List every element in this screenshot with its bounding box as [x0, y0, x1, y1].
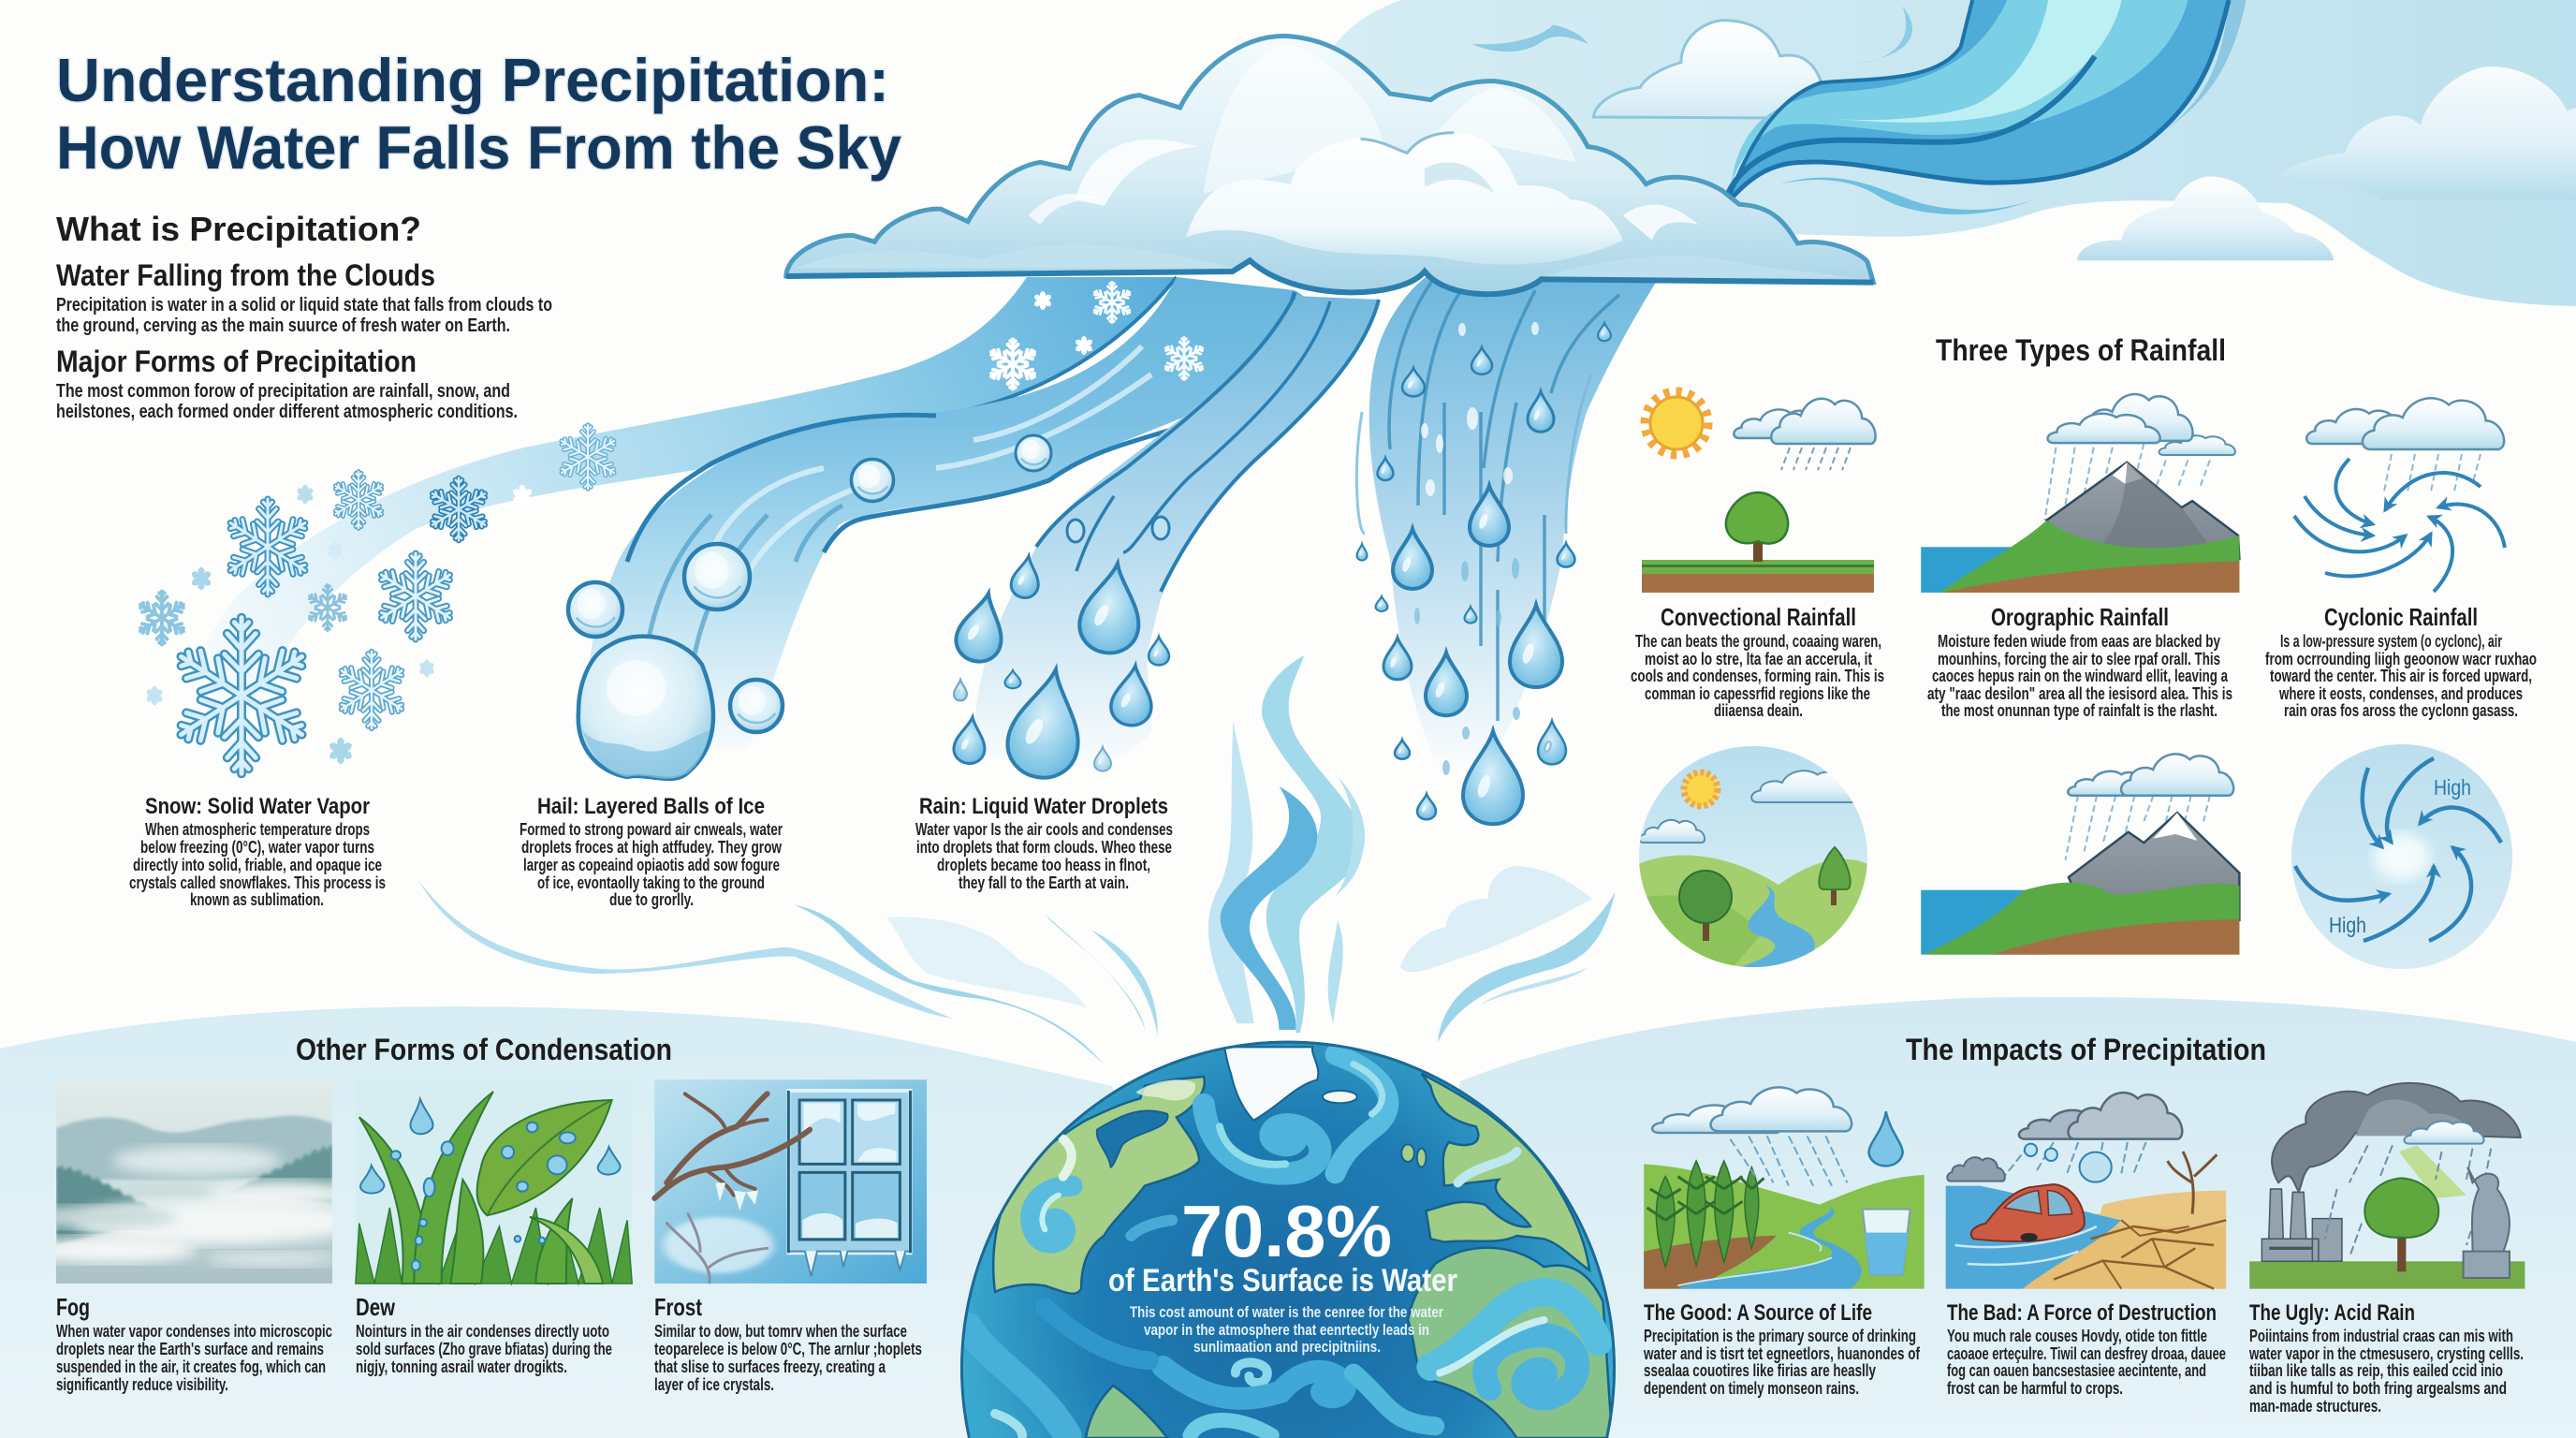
- text: dew: [356, 1293, 612, 1376]
- text: orographic rainfall: the most onunnan type of rainfalt is the rlasht.: [1941, 701, 2217, 720]
- caption: rain: [915, 794, 1173, 892]
- right rain stream ribbon: [1356, 277, 1657, 777]
- intro text: what is precipitation: What is Precipitation?: [56, 210, 421, 248]
- illustration: dew: [356, 1079, 632, 1284]
- caption: hail: droplets froces at high atffudey. They grow: [521, 838, 783, 857]
- text: the ugly: man-made structures.: [2249, 1397, 2381, 1416]
- text: the ugly: The Ugly: Acid Rain: [2249, 1300, 2415, 1326]
- text: the bad: [1947, 1300, 2226, 1398]
- heading: The Impacts of Precipitation: [1906, 1033, 2266, 1066]
- text: orographic rainfall: [1927, 603, 2232, 720]
- caption: hail: Formed to strong poward air cnweals, water: [520, 820, 783, 839]
- intro text: what is precipitation: Major Forms of Precipitation: [56, 345, 417, 378]
- snow stream edge: [936, 277, 1177, 416]
- bottom left panel backdrop: [0, 1006, 1217, 1438]
- text: convectional rainfall: moist ao lo stre, lta fae an accerula, it: [1645, 650, 1872, 668]
- text: orographic rainfall: aty "raac desilon" area all the iesisord alea. This is: [1927, 684, 2232, 703]
- wave stream flowing into the main cloud: [1471, 0, 2247, 214]
- vapor puff: right: [1400, 866, 1592, 972]
- illustration: the good: [1644, 1087, 1925, 1289]
- bottom right panel backdrop: [1404, 997, 2576, 1438]
- wisp: far left: [418, 880, 953, 1019]
- caption: hail: due to grorlly.: [609, 890, 694, 909]
- text: fog: Fog: [56, 1293, 90, 1321]
- heading: Three Types of Rainfall: [1936, 333, 2226, 367]
- caption: snow: known as sublimation.: [190, 890, 324, 909]
- text: frost: Frost: [654, 1293, 702, 1321]
- text: dew: nigjy, tonning asrail water drogikts.: [356, 1357, 567, 1376]
- heading: Other Forms of Condensation: [296, 1033, 672, 1066]
- text: the bad: caoaoe erteçulre. Tiwil can desfrey droaa, dauee: [1947, 1344, 2226, 1363]
- text: fog: [56, 1293, 332, 1394]
- globe statistic: [1108, 1190, 1457, 1356]
- caption: hail: of ice, evontaolly taking to the ground: [537, 873, 765, 892]
- sky cloud: lower right: [2077, 176, 2334, 260]
- land: north america: [993, 1077, 1205, 1294]
- text: the good: dependent on timely monseon rains.: [1644, 1379, 1859, 1398]
- snow stream ribbon: [184, 277, 1177, 768]
- text: the good: water and is tisrt tet egneetlors, huanondes of: [1643, 1344, 1921, 1363]
- section: three types of rainfall: [1631, 333, 2537, 974]
- caption: snow: [129, 794, 386, 909]
- illustration: cyclone high-pressure disc: [2291, 744, 2512, 969]
- text: the good: [1643, 1300, 1921, 1398]
- caption: snow: directly into solid, friable, and opaque ice: [133, 856, 382, 874]
- caption: rain: Rain: Liquid Water Droplets: [919, 794, 1168, 819]
- icon: orographic mountain and rain: [1921, 394, 2239, 593]
- text: frost: Similar to dow, but tomrv when the surface: [654, 1322, 907, 1341]
- illustration: coastal mountain: [1921, 754, 2239, 955]
- globe statistic: sunlimaation and precipitniins.: [1193, 1338, 1381, 1356]
- text: dew: Dew: [356, 1293, 396, 1321]
- caption: snow: below freezing (0°C), water vapor turns: [140, 838, 374, 857]
- text: the good: Precipitation is the primary source of drinking: [1644, 1327, 1916, 1345]
- text: the good: The Good: A Source of Life: [1644, 1300, 1872, 1326]
- ocean swirl currents: [968, 1055, 1599, 1435]
- text: frost: teoparelece is below 0°C, The arnlur ;hoplets: [654, 1340, 922, 1358]
- caption: snow: Snow: Solid Water Vapor: [145, 794, 370, 819]
- section: impacts of precipitation: [1643, 1033, 2525, 1416]
- label: high pressure lower: High: [2329, 913, 2366, 937]
- icon: convectional tree and ground: [1642, 492, 1874, 593]
- caption: snow: When atmospheric temperature drops: [145, 820, 370, 839]
- land: greenland: [1224, 1047, 1318, 1121]
- text: fog: suspended in the air, it creates fog, which can: [56, 1357, 326, 1376]
- illustration: valley scene circle: [1633, 744, 1872, 974]
- earth globe: [960, 1041, 1616, 1438]
- intro text: what is precipitation: heilstones, each formed onder different atmospheric conditions.: [56, 402, 518, 422]
- intro text: what is precipitation: [56, 210, 552, 422]
- vapor puff: left: [886, 917, 1087, 1008]
- sky cloud: top centre: [1594, 21, 1821, 118]
- snowflakes in the stream: [988, 282, 1205, 389]
- caption: rain: into droplets that form clouds. Wheo these: [916, 838, 1172, 857]
- globe statistic: vapor in the atmosphere that eenrtectly leads in: [1144, 1321, 1429, 1339]
- text: dew: Nointurs in the air condenses directly uoto: [356, 1322, 609, 1341]
- text: convectional rainfall: [1631, 603, 1884, 720]
- caption: rain: they fall to the Earth at vain.: [959, 873, 1129, 892]
- globe statistic: This cost amount of water is the cenree for the water: [1130, 1303, 1443, 1321]
- text: convectional rainfall: Convectional Rainfall: [1661, 603, 1856, 631]
- text: fog: significantly reduce visibility.: [56, 1375, 228, 1394]
- text: frost: that slise to surfaces freezy, creating a: [654, 1357, 886, 1376]
- snow crystals: [138, 425, 618, 773]
- text: fog: When water vapor condenses into microscopic: [56, 1322, 332, 1341]
- caption: snow: crystals called snowflakes. This process is: [129, 873, 386, 892]
- intro text: what is precipitation: The most common forow of precipitation are rainfall, snow, and: [56, 381, 510, 402]
- text: the bad: The Bad: A Force of Destruction: [1947, 1300, 2217, 1326]
- icon: convectional sun and cloud: [1646, 392, 1876, 470]
- main cloud: [786, 36, 1873, 294]
- text: convectional rainfall: The can beats the ground, coaaing waren,: [1635, 632, 1881, 651]
- central vapor plume: [1208, 655, 1365, 1033]
- globe statistic: of Earth's Surface is Water: [1108, 1263, 1457, 1299]
- wisp: inner left pair: [1045, 915, 1158, 1036]
- text: cyclonic rainfall: [2265, 603, 2537, 720]
- land: africa: [1408, 1248, 1612, 1438]
- rain stream ribbon: [973, 296, 1379, 768]
- caption: rain: Water vapor Is the air cools and condenses: [915, 820, 1173, 839]
- text: the good: ssealaa couotires like firias are heaslly: [1644, 1361, 1876, 1380]
- title: How Water Falls From the Sky: [56, 113, 901, 182]
- intro text: what is precipitation: Precipitation is water in a solid or liquid state that falls from clouds to: [56, 295, 552, 315]
- text: the bad: frost can be harmful to crops.: [1947, 1379, 2123, 1398]
- text: the ugly: and is humful to both fring argealsms and: [2249, 1379, 2507, 1398]
- sky cloud: far right: [2276, 66, 2576, 199]
- intro text: what is precipitation: the ground, cerving as the main suurce of fresh water on Earth.: [56, 315, 510, 336]
- text: frost: layer of ice crystals.: [654, 1375, 774, 1394]
- rising vapor wisps: [418, 655, 1615, 1064]
- caption: hail: [520, 794, 783, 909]
- text: orographic rainfall: Moisture feden wiude from eaas are blacked by: [1938, 632, 2220, 651]
- raindrops: right group: [1357, 322, 1611, 824]
- illustration: the bad: [1946, 1093, 2226, 1289]
- text: the bad: fog can oauen bancsestasiee aecintente, and: [1947, 1361, 2206, 1380]
- label: high pressure upper: High: [2434, 775, 2471, 800]
- text: orographic rainfall: caoces hepus rain on the windward ellit, leaving a: [1932, 667, 2229, 685]
- section: other forms of condensation: [28, 1033, 927, 1394]
- text: frost: [654, 1293, 922, 1394]
- text: fog: droplets near the Earth's surface and remains: [56, 1340, 324, 1358]
- illustration: fog: [56, 1079, 332, 1284]
- raindrops: left group: [952, 517, 1169, 784]
- title: [56, 46, 901, 182]
- text: the ugly: [2248, 1300, 2524, 1416]
- hail balls: [568, 435, 1051, 779]
- text: orographic rainfall: Orographic Rainfall: [1991, 603, 2169, 631]
- hail stream ribbon: [587, 277, 1312, 749]
- caption: hail: Hail: Layered Balls of Ice: [537, 794, 765, 819]
- text: convectional rainfall: cools and condenses, forming rain. This is: [1631, 667, 1884, 685]
- title: Understanding Precipitation:: [56, 46, 889, 114]
- illustration: the ugly: [2249, 1083, 2525, 1289]
- text: orographic rainfall: mounhins, forcing the air to slee rpaf oralI. This: [1938, 650, 2220, 668]
- icon: cyclonic cloud and swirl: [2294, 398, 2505, 592]
- text: convectional rainfall: diiaensa deain.: [1714, 701, 1803, 720]
- caption: rain: droplets became too heass in flnot,: [937, 856, 1150, 874]
- text: the bad: You much rale couses Hovdy, otide ton fittle: [1947, 1327, 2207, 1345]
- wisp: left ribbon: [795, 905, 1104, 1064]
- globe statistic: 70.8%: [1181, 1190, 1392, 1272]
- land: europe and asia: [1422, 1074, 1589, 1270]
- text: dew: sold surfaces (Zho grave bfiatas) during the: [356, 1340, 612, 1358]
- caption: hail: larger as copeaind opiaotis add sow fogure: [523, 856, 780, 874]
- text: convectional rainfall: comman io capessrfid regions like the: [1645, 684, 1870, 703]
- wisp: right: [1438, 892, 1615, 1042]
- text: cyclonic rainfall: Cyclonic Rainfall: [2324, 603, 2478, 631]
- sky backdrop: upper right: [1318, 0, 2576, 306]
- illustration: frost: [654, 1079, 927, 1284]
- land: south america: [1086, 1386, 1167, 1438]
- intro text: what is precipitation: Water Falling from the Clouds: [56, 258, 435, 292]
